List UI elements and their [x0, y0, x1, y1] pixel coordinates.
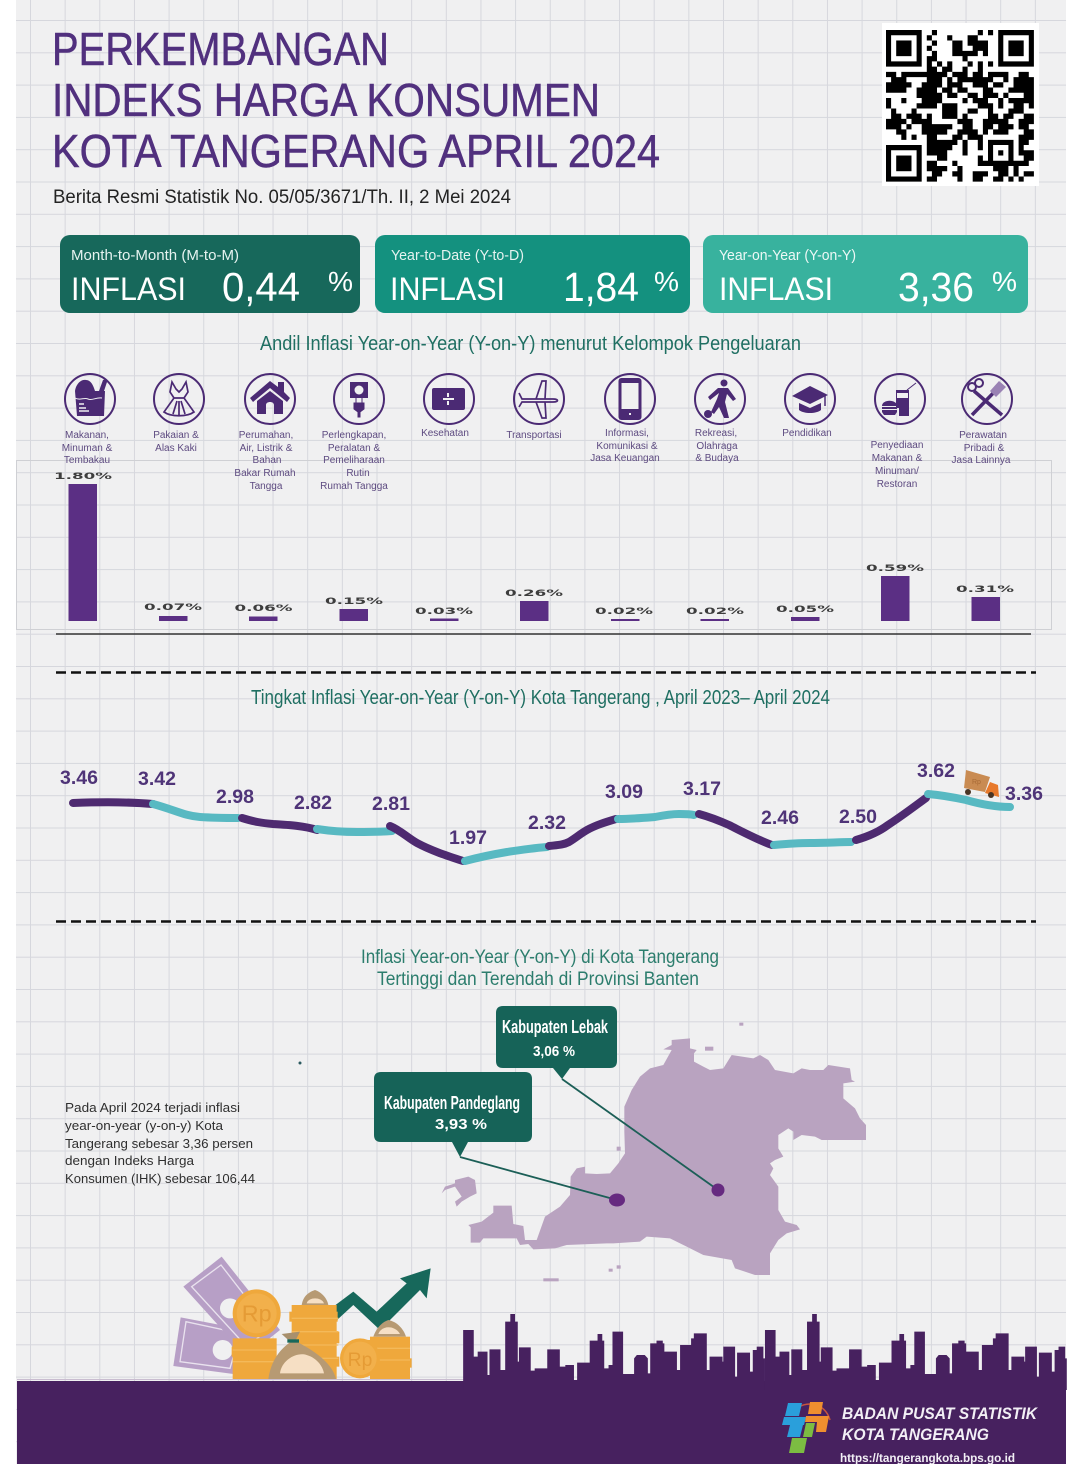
- icon: soccer player: [695, 374, 745, 424]
- line values: 2.98: [216, 787, 254, 808]
- label: recreation: Olahraga: [696, 441, 738, 452]
- label: restaurants: Penyediaan: [871, 440, 923, 451]
- icon: delivery truck: Rp: [972, 779, 981, 786]
- label: restaurants: Makanan &: [872, 453, 923, 464]
- coins with Rp: Rp: [242, 1301, 272, 1327]
- icon: smartphone: [605, 374, 655, 424]
- callout: Kabupaten Lebak: Kabupaten Lebak: [502, 1017, 609, 1037]
- label: household equipment: Rumah Tangga: [320, 481, 388, 492]
- text block: summary: year-on-year (y-on-y) Kota: [65, 1118, 224, 1133]
- card: year-on-year: [703, 235, 1028, 313]
- heading: inflation trend: Tingkat Inflasi Year-on-Year (Y-on-Y) Kota Tangerang , April 2023– April 2024: [251, 687, 830, 709]
- bar values: 0.59%: [866, 564, 925, 574]
- label: household equipment: Perlengkapan,: [322, 430, 386, 441]
- coin stacks: [232, 1305, 412, 1379]
- footer organisation name: [842, 1405, 1038, 1444]
- bar values: 0.06%: [234, 604, 293, 614]
- label: education: Pendidikan: [782, 428, 832, 439]
- line values: 2.50: [839, 807, 877, 828]
- logo: BPS: [782, 1402, 830, 1453]
- card: year-to-date: INFLASI: [390, 271, 505, 307]
- title: [52, 23, 660, 177]
- line values: 2.46: [761, 808, 799, 829]
- callout: Kabupaten Lebak: 3,06 %: [533, 1043, 575, 1060]
- icon: scissors and comb: [962, 374, 1012, 424]
- card: year-to-date: %: [654, 266, 679, 297]
- money bags: [268, 1290, 406, 1379]
- bar values: [54, 472, 1015, 617]
- card: year-on-year: Year-on-Year (Y-on-Y): [719, 247, 856, 264]
- bar values: 0.26%: [505, 589, 564, 599]
- heading: contribution chart: Andil Inflasi Year-on-Year (Y-on-Y) menurut Kelompok Pengeluaran: [260, 333, 801, 355]
- label: housing: [234, 430, 296, 492]
- footer band: [17, 1314, 1067, 1464]
- label: housing: Bakar Rumah: [234, 468, 296, 479]
- coins with Rp: Rp: [348, 1350, 372, 1371]
- label: personal care: Jasa Lainnya: [952, 455, 1011, 466]
- label: food: Minuman &: [62, 443, 113, 454]
- label: restaurants: Restoran: [877, 479, 917, 490]
- text block: summary: Konsumen (IHK) sebesar 106,44: [65, 1171, 255, 1186]
- line values: 3.17: [683, 779, 721, 800]
- illustration: money and rising arrow: [173, 1257, 431, 1379]
- label: food: [62, 430, 113, 466]
- line values: 2.32: [528, 813, 566, 834]
- label: food: Tembakau: [64, 455, 110, 466]
- card: month-to-month: Month-to-Month (M-to-M): [71, 247, 239, 264]
- label: clothing: Alas Kaki: [155, 443, 197, 454]
- panel: contribution bar chart: [16, 460, 1052, 634]
- map: Banten province: [442, 1023, 866, 1281]
- label: household equipment: Peralatan &: [328, 443, 380, 454]
- line values: [60, 761, 1043, 849]
- line values: 3.42: [138, 769, 176, 790]
- bar values: 0.15%: [325, 597, 384, 607]
- label: health: Kesehatan: [421, 428, 469, 439]
- label: household equipment: [320, 430, 388, 492]
- text block: summary: Tangerang sebesar 3,36 persen: [65, 1136, 253, 1151]
- bar values: 0.05%: [776, 605, 835, 615]
- icon: delivery truck: [964, 770, 999, 798]
- label: information: Informasi,: [605, 428, 649, 439]
- label: clothing: [153, 430, 199, 454]
- label: housing: Bahan: [253, 455, 281, 466]
- label: personal care: Pribadi &: [964, 443, 1005, 454]
- bar values: 0.02%: [686, 607, 745, 617]
- card: year-on-year: %: [992, 266, 1017, 297]
- card: year-to-date: [375, 235, 690, 313]
- label: personal care: [952, 430, 1011, 466]
- label: information: [590, 428, 660, 464]
- card: year-on-year: INFLASI: [719, 271, 833, 307]
- callout: Kabupaten Pandeglang: 3,93 %: [435, 1116, 487, 1133]
- line values: 3.46: [60, 768, 98, 789]
- label: household equipment: Rutin: [346, 468, 370, 479]
- card: month-to-month: 0,44: [222, 264, 300, 310]
- line values: 3.09: [605, 782, 643, 803]
- bars: [68, 484, 1000, 621]
- arrow: [333, 1268, 431, 1330]
- QR code: [882, 23, 1039, 186]
- card: month-to-month: %: [328, 266, 353, 297]
- line values: 2.82: [294, 793, 332, 814]
- icon: clothing: [154, 374, 204, 424]
- text block: summary: [65, 1100, 255, 1186]
- icon: airplane: [514, 374, 564, 424]
- icon: household appliance: [334, 374, 384, 424]
- title: INDEKS HARGA KONSUMEN: [52, 74, 600, 126]
- card: year-to-date: 1,84: [563, 264, 639, 310]
- card: year-to-date: Year-to-Date (Y-to-D): [391, 247, 524, 264]
- label: food: Makanan,: [65, 430, 109, 441]
- label: restaurants: Minuman/: [875, 466, 919, 477]
- heading: highest and lowest: Inflasi Year-on-Year (Y-on-Y) di Kota Tangerang: [361, 947, 719, 968]
- heading: highest and lowest: Tertinggi dan Terendah di Provinsi Banten: [377, 969, 699, 990]
- line chart: year-on-year inflation: [60, 761, 1043, 861]
- label: housing: Air, Listrik &: [240, 443, 293, 454]
- label: clothing: Pakaian &: [153, 430, 199, 441]
- skyline: [463, 1314, 1067, 1390]
- callout: Kabupaten Lebak: [496, 1006, 724, 1196]
- bar values: 0.02%: [595, 607, 654, 617]
- label: household equipment: Pemeliharaan: [323, 455, 385, 466]
- card: month-to-month: [60, 235, 360, 313]
- text block: summary: dengan Indeks Harga: [65, 1153, 195, 1168]
- text block: summary: Pada April 2024 terjadi inflasi: [65, 1100, 240, 1115]
- icon: health kit: [424, 374, 474, 424]
- icon: burger and drink: [875, 374, 925, 424]
- bar values: 0.03%: [415, 607, 474, 617]
- line values: 3.36: [1005, 784, 1043, 805]
- bar values: 1.80%: [54, 472, 113, 482]
- label: information: Jasa Keuangan: [590, 453, 660, 464]
- icon: graduation cap: [785, 374, 835, 424]
- label: transport: Transportasi: [506, 430, 562, 441]
- icon: food and drink: [65, 374, 115, 424]
- label: information: Komunikasi &: [596, 441, 658, 452]
- heading: highest and lowest: [361, 947, 719, 990]
- title: KOTA TANGERANG APRIL 2024: [52, 125, 660, 177]
- label: housing: Tangga: [250, 481, 283, 492]
- line values: 2.81: [372, 794, 410, 815]
- label: restaurants: [871, 440, 923, 490]
- label: recreation: Rekreasi,: [695, 428, 737, 439]
- icon: house: [245, 374, 295, 424]
- card: year-on-year: 3,36: [898, 264, 974, 310]
- subtitle: Berita Resmi Statistik No. 05/05/3671/Th. II, 2 Mei 2024: [53, 187, 511, 208]
- label: recreation: & Budaya: [695, 453, 739, 464]
- banknotes: [173, 1257, 280, 1374]
- card: month-to-month: INFLASI: [71, 271, 186, 307]
- footer organisation name: KOTA TANGERANG: [842, 1426, 989, 1444]
- bar values: 0.31%: [956, 585, 1015, 595]
- coins with Rp: [233, 1289, 380, 1378]
- callout: Kabupaten Pandeglang: Kabupaten Pandeglang: [384, 1093, 520, 1113]
- line values: 1.97: [449, 828, 487, 849]
- label: housing: Perumahan,: [239, 430, 293, 441]
- label: personal care: Perawatan: [959, 430, 1007, 441]
- callout: Kabupaten Pandeglang: [374, 1072, 625, 1206]
- bar values: 0.07%: [144, 603, 203, 613]
- title: PERKEMBANGAN: [52, 23, 389, 75]
- label: recreation: [695, 428, 739, 464]
- footer organisation name: BADAN PUSAT STATISTIK: [842, 1405, 1038, 1423]
- line values: 3.62: [917, 761, 955, 782]
